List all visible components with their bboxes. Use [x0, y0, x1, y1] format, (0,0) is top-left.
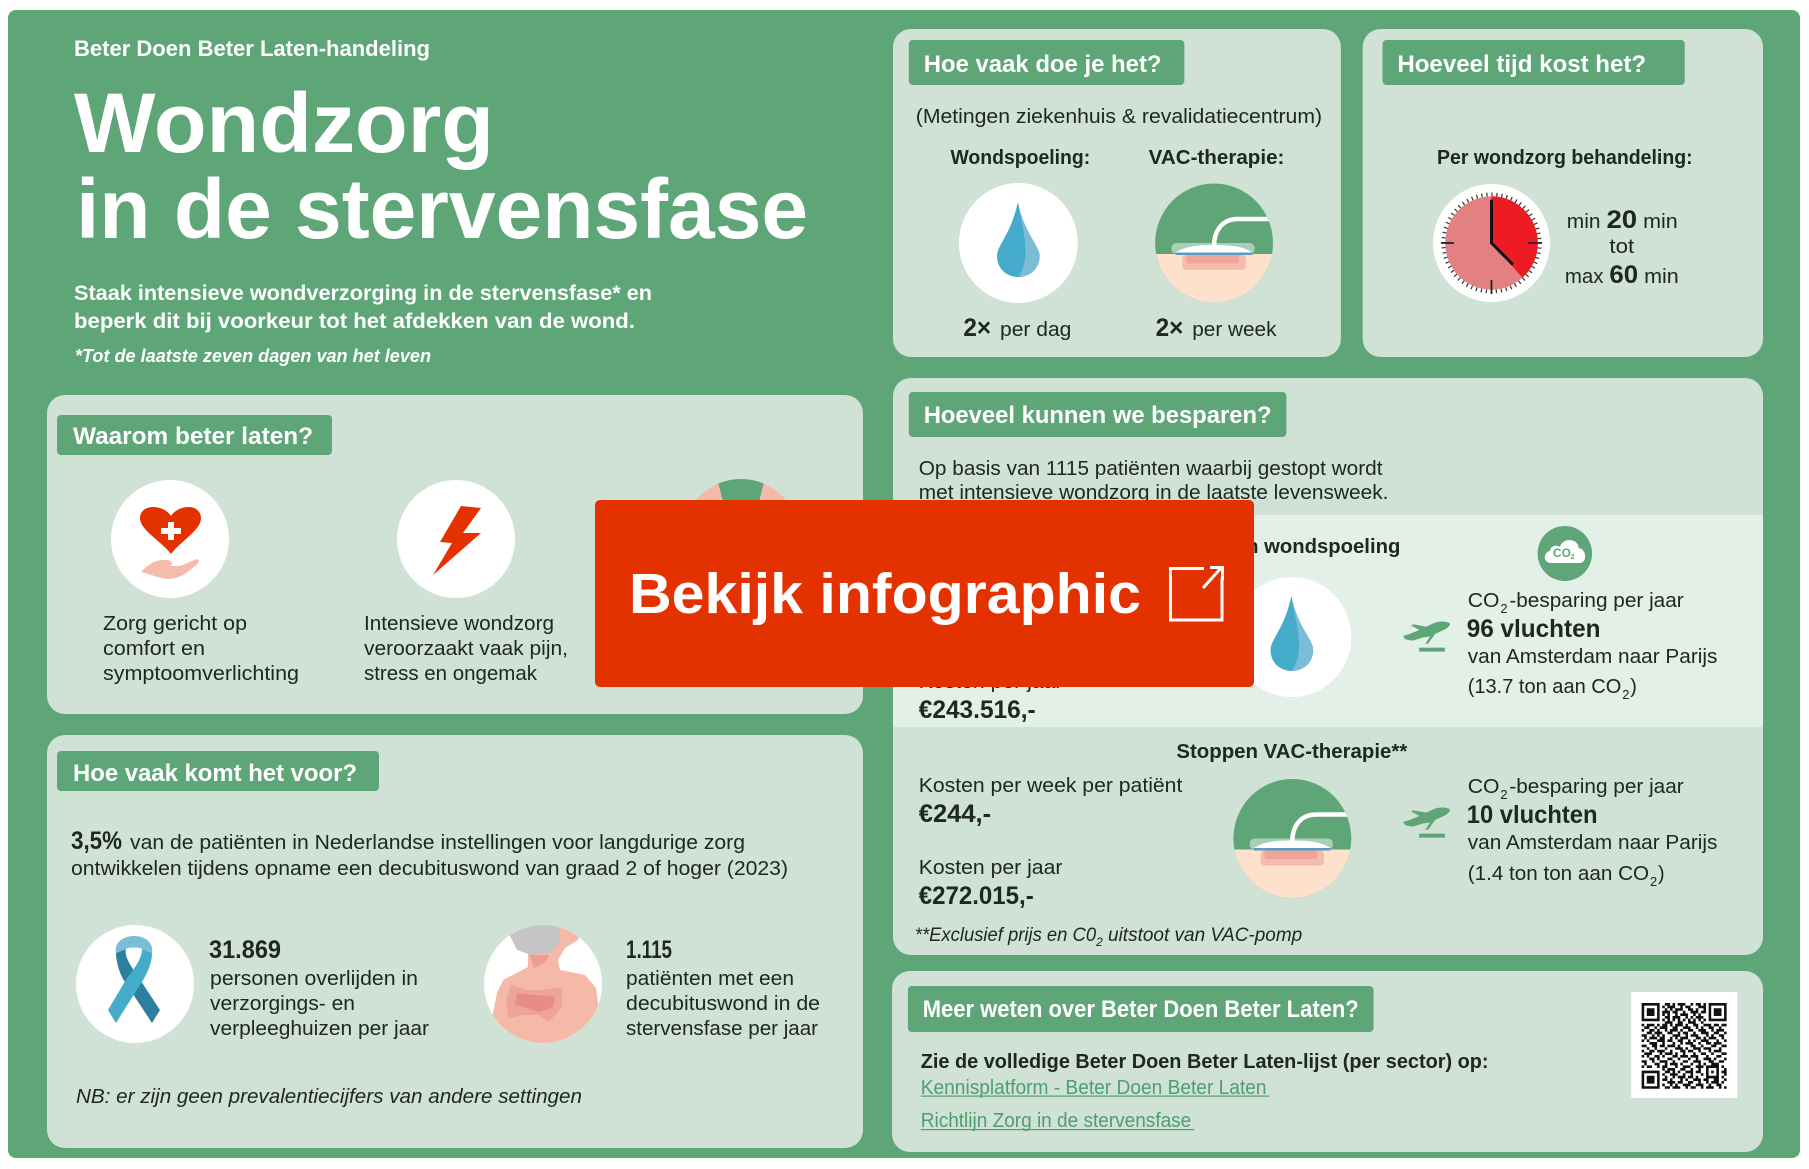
icon: CO2 cloud: 2: [1571, 554, 1575, 561]
note: NB: er zijn geen prevalentiecijfers van andere settingen: [76, 1086, 582, 1108]
cost VAC-therapie: €244,-: [919, 800, 991, 828]
frequency VAC-therapie: 2×: [1156, 314, 1183, 342]
title: [74, 76, 808, 256]
heading tag: Hoe vaak komt het voor?: [73, 760, 357, 787]
stat patients: 1.115: [626, 936, 672, 964]
intro text: Staak intensieve wondverzorging in de stervensfase* en: [74, 282, 652, 305]
intro text: met intensieve wondzorg in de laatste levensweek.: [919, 482, 1388, 504]
label per behandeling: Per wondzorg behandeling:: [1437, 147, 1693, 169]
frequency wondspoeling: [963, 314, 1071, 342]
reason text 1: comfort en: [103, 638, 205, 660]
panel: waarom beter laten: [47, 395, 863, 714]
heading tag: Hoeveel tijd kost het?: [1397, 51, 1646, 78]
footnote: 2: [1095, 935, 1103, 949]
CO2 saving VAC-therapie: 2: [1500, 787, 1508, 802]
CO2 saving VAC-therapie: van Amsterdam naar Parijs: [1468, 832, 1717, 854]
time range: min: [1567, 211, 1601, 233]
frequency VAC-therapie: [1156, 314, 1277, 342]
prevalence text: 3,5%: [71, 827, 122, 855]
icon: VAC therapy: [1233, 778, 1352, 900]
title: Wondzorg: [74, 76, 494, 170]
link: richtlijn: Richtlijn Zorg in de stervensfase: [921, 1110, 1191, 1132]
panel: meer weten: [892, 971, 1763, 1152]
label wondspoeling: Wondspoeling:: [950, 147, 1090, 169]
subheading VAC-therapie: Stoppen VAC-therapie**: [1176, 741, 1408, 763]
reason text 1: symptoomverlichting: [103, 663, 299, 685]
heading tag: [1383, 40, 1685, 85]
heading tag: [909, 40, 1184, 85]
icon: plane: [1403, 807, 1450, 838]
stat deaths: personen overlijden in: [210, 968, 418, 990]
CO2 saving wondspoeling: 2: [1500, 601, 1508, 616]
cost wondspoeling: €243.516,-: [919, 696, 1036, 724]
CO2 saving wondspoeling: 2: [1622, 687, 1629, 702]
panel: hoeveel tijd kost het: [1363, 29, 1763, 357]
heading tag: [57, 415, 332, 455]
CO2 saving VAC-therapie: [1467, 776, 1717, 889]
time range: 60: [1609, 261, 1638, 289]
reason text 1: [103, 613, 299, 685]
button label: Bekijk infographic: [629, 562, 1141, 626]
stat patients: [626, 936, 820, 1040]
panel: hoe vaak doe je het: [893, 29, 1341, 357]
stat patients: patiënten met een: [626, 968, 794, 990]
icon: ribbon: [76, 925, 194, 1043]
stat deaths: 31.869: [209, 936, 281, 964]
CO2 saving VAC-therapie: -besparing per jaar: [1509, 776, 1684, 798]
icon: clock: [1433, 184, 1550, 302]
icon: VAC therapy: [1155, 183, 1274, 304]
CO2 saving wondspoeling: CO: [1468, 590, 1499, 612]
heading tag: Hoeveel kunnen we besparen?: [924, 402, 1272, 429]
icon: plane: [1403, 621, 1450, 652]
CO2 saving VAC-therapie: 10 vluchten: [1467, 801, 1598, 829]
stat deaths: [209, 936, 429, 1040]
time range: max: [1565, 266, 1604, 288]
footnote: uitstoot van VAC-pomp: [1108, 925, 1302, 946]
icon: CO2 cloud: CO: [1553, 546, 1571, 560]
CO2 saving wondspoeling: ): [1630, 676, 1637, 698]
subheading wondspoeling: Stoppen wondspoeling: [1177, 536, 1400, 558]
cost VAC-therapie: Kosten per week per patiënt: [919, 775, 1183, 797]
reason text 2: stress en ongemak: [364, 663, 538, 685]
CO2 saving wondspoeling: [1467, 590, 1717, 702]
link: kennisplatform: Kennisplatform - Beter Doen Beter Laten: [921, 1077, 1267, 1099]
heading tag: Hoe vaak doe je het?: [924, 51, 1162, 78]
CO2 saving wondspoeling: (13.7 ton aan CO: [1468, 676, 1621, 698]
icon: water drop: [1232, 577, 1351, 697]
time range: min: [1644, 266, 1679, 288]
intro text: Op basis van 1115 patiënten waarbij gestopt wordt: [919, 458, 1383, 480]
reason text 2: [364, 613, 568, 685]
icon: body with pressure wound: [484, 925, 602, 1043]
CO2 saving VAC-therapie: ): [1658, 863, 1665, 885]
header block: [74, 36, 808, 366]
cost wondspoeling: Kosten per jaar: [919, 671, 1063, 693]
icon: lightning: [397, 480, 515, 598]
cost VAC-therapie: [919, 775, 1183, 910]
QR code: [1631, 992, 1737, 1098]
kicker: Beter Doen Beter Laten-handeling: [74, 36, 430, 61]
frequency wondspoeling: per dag: [1000, 319, 1071, 341]
subtitle: (Metingen ziekenhuis & revalidatiecentrum): [916, 106, 1322, 128]
footnote: **Exclusief prijs en C0: [915, 925, 1097, 946]
heading tag: [57, 751, 379, 791]
prevalence text: ontwikkelen tijdens opname een decubituswond van graad 2 of hoger (2023): [71, 858, 788, 880]
CO2 saving VAC-therapie: (1.4 ton ton aan CO: [1468, 863, 1649, 885]
title: in de stervensfase: [76, 162, 808, 256]
CO2 saving VAC-therapie: CO: [1468, 776, 1499, 798]
intro text: [74, 282, 652, 333]
time range: min: [1643, 211, 1678, 233]
heading tag: Waarom beter laten?: [73, 423, 313, 450]
CO2 saving VAC-therapie: 2: [1650, 874, 1657, 889]
reason text 2: veroorzaakt vaak pijn,: [364, 638, 568, 660]
reason text 2: Intensieve wondzorg: [364, 613, 554, 635]
light band: wondspoeling: [893, 515, 1763, 727]
cost VAC-therapie: €272.015,-: [919, 882, 1034, 910]
icon: heart in hand: [111, 480, 229, 598]
CO2 saving wondspoeling: 96 vluchten: [1467, 615, 1601, 643]
icon: CO2 cloud: [1538, 526, 1592, 581]
intro text: beperk dit bij voorkeur tot het afdekken van de wond.: [74, 310, 635, 333]
stat deaths: verzorgings- en: [210, 993, 355, 1015]
heading tag: Meer weten over Beter Doen Beter Laten?: [923, 996, 1359, 1023]
time range: tot: [1609, 236, 1635, 258]
panel: hoe vaak komt het voor: [47, 735, 863, 1148]
panel: hoeveel kunnen we besparen: [893, 378, 1763, 955]
reason text 1: Zorg gericht op: [103, 613, 247, 635]
prevalence text: van de patiënten in Nederlandse instellingen voor langdurige zorg: [130, 832, 745, 854]
frequency wondspoeling: 2×: [963, 314, 991, 342]
label VAC-therapie: VAC-therapie:: [1149, 147, 1284, 169]
icon: water drop: [959, 183, 1078, 303]
icon: external link: [1170, 568, 1222, 620]
cost VAC-therapie: Kosten per jaar: [919, 857, 1063, 879]
stat patients: stervensfase per jaar: [626, 1018, 818, 1040]
frequency VAC-therapie: per week: [1192, 319, 1277, 341]
footnote: [915, 925, 1302, 949]
call to action button: [595, 500, 1254, 687]
CO2 saving wondspoeling: van Amsterdam naar Parijs: [1468, 646, 1717, 668]
stat deaths: verpleeghuizen per jaar: [210, 1018, 429, 1040]
prevalence text: [71, 827, 788, 880]
time range: 20: [1606, 206, 1637, 234]
heading tag: [909, 392, 1286, 437]
body text: Zie de volledige Beter Doen Beter Laten-lijst (per sector) op:: [921, 1051, 1489, 1073]
time range: [1565, 206, 1679, 289]
icon: body partly hidden: [696, 479, 786, 500]
footnote: *Tot de laatste zeven dagen van het leven: [75, 346, 431, 366]
cost wondspoeling: [919, 671, 1063, 724]
CO2 saving wondspoeling: -besparing per jaar: [1509, 590, 1684, 612]
heading tag: [908, 986, 1374, 1032]
stat patients: decubituswond in de: [626, 993, 820, 1015]
intro text: [919, 458, 1388, 504]
